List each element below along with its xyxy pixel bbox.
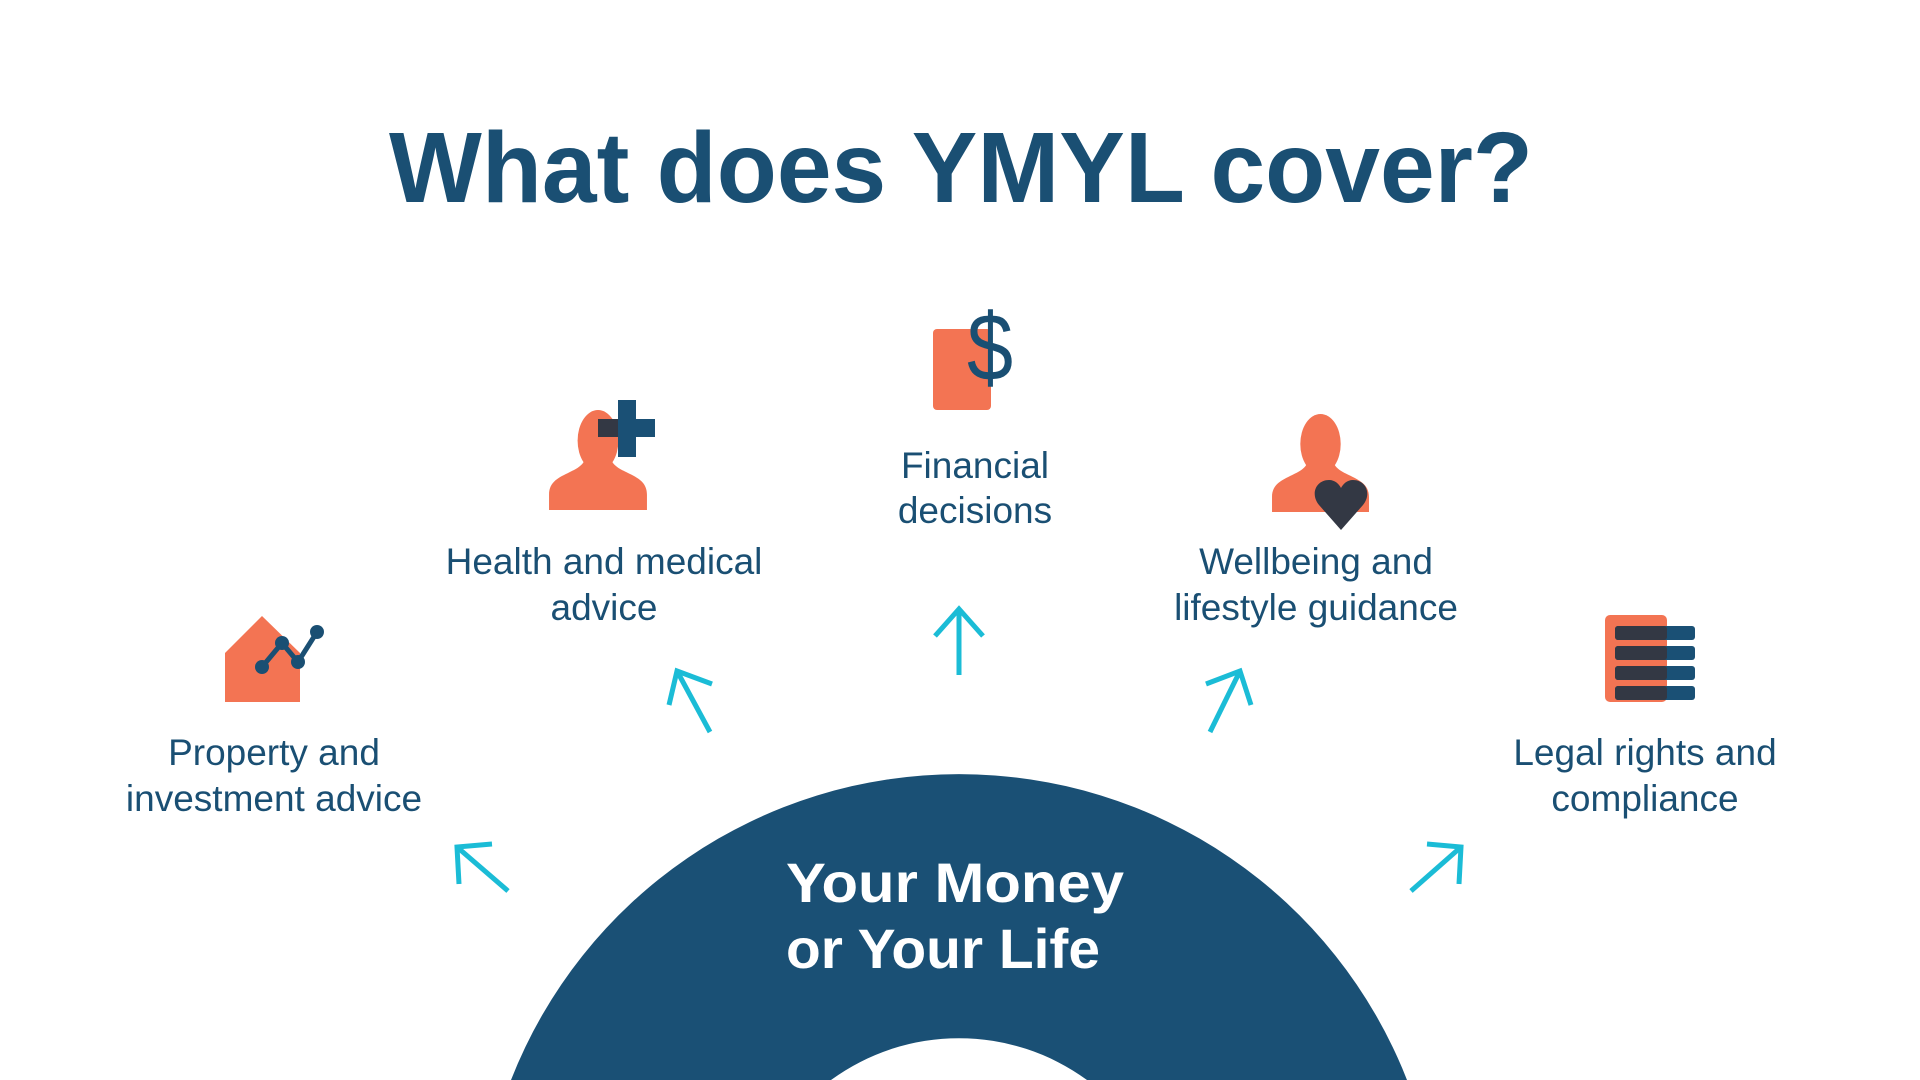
label: health xyxy=(446,541,762,628)
center label: or Your Life xyxy=(786,917,1100,980)
label: health: advice xyxy=(551,587,657,628)
label: property: investment advice xyxy=(126,778,422,819)
label: wellbeing: lifestyle guidance xyxy=(1174,587,1458,628)
arrow: health xyxy=(669,671,712,732)
title: What does YMYL cover? xyxy=(389,112,1533,224)
arrow: legal xyxy=(1411,844,1461,891)
icon: legal document xyxy=(1605,615,1695,702)
icon: dollar xyxy=(933,294,1013,410)
icon: house with chart xyxy=(225,616,324,702)
center label xyxy=(786,851,1124,980)
arrow: property xyxy=(457,844,508,891)
label: legal: compliance xyxy=(1551,778,1739,819)
label: legal: Legal rights and xyxy=(1513,732,1777,773)
center label: Your Money xyxy=(786,851,1124,914)
label: financial: decisions xyxy=(898,490,1052,531)
arrow: financial xyxy=(935,609,983,675)
label: legal xyxy=(1513,732,1777,819)
arrow: wellbeing xyxy=(1206,671,1251,732)
label: wellbeing: Wellbeing and xyxy=(1199,541,1433,582)
icon: person with heart xyxy=(1272,414,1369,530)
icon: health head with cross xyxy=(549,400,655,510)
label: wellbeing xyxy=(1174,541,1458,628)
label: property: Property and xyxy=(168,732,380,773)
central semicircle xyxy=(511,774,1407,1080)
icon: dollar: $ xyxy=(967,294,1013,401)
label: health: Health and medical xyxy=(446,541,762,582)
label: financial: Financial xyxy=(901,445,1049,486)
label: property xyxy=(126,732,422,819)
label: financial xyxy=(898,445,1052,531)
arrows xyxy=(457,609,1461,891)
